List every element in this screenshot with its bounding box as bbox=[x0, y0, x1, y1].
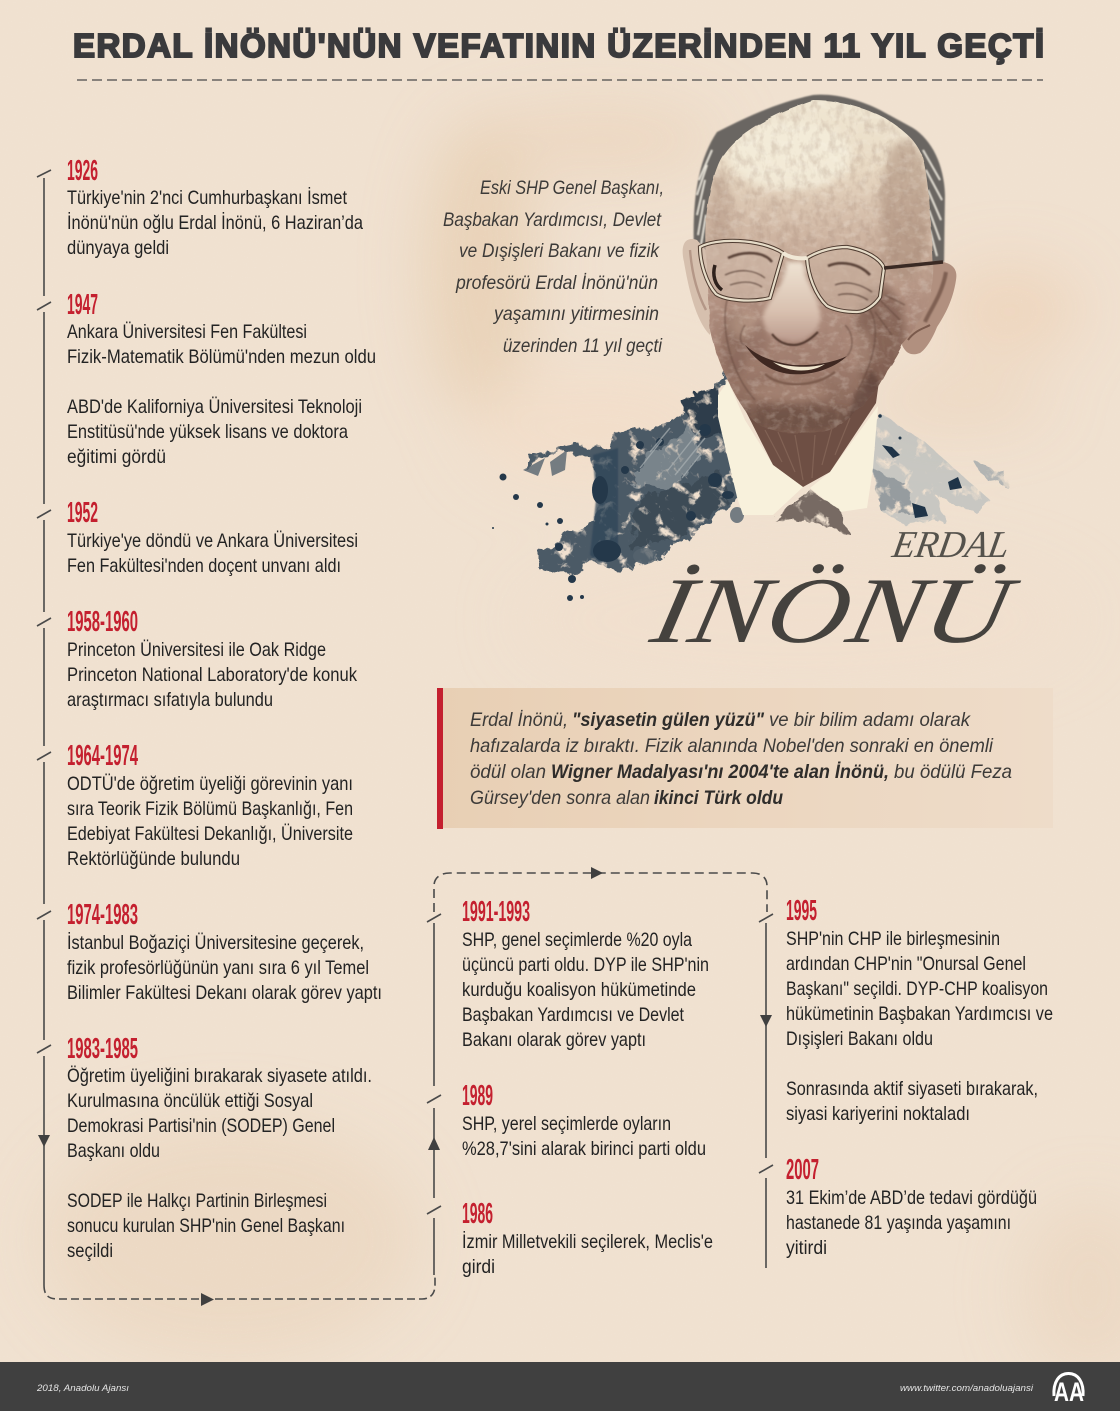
entry: 1983-1985: SODEP ile Halkçı Partinin Birleşmesi bbox=[67, 1190, 327, 1212]
entry: 1952: Fen Fakültesi'nden doçent unvanı aldı bbox=[67, 555, 341, 577]
entry: 1983-1985: Demokrasi Partisi'nin (SODEP) Genel bbox=[67, 1115, 335, 1137]
arrow: top right bbox=[591, 867, 603, 879]
entry: 1983-1985: sonucu kurulan SHP'nin Genel Başkanı bbox=[67, 1215, 345, 1237]
entry: 1958-1960: Princeton National Laboratory'de konuk bbox=[67, 664, 357, 686]
entry: 1947: 1947 bbox=[67, 289, 98, 321]
entry: 1947: ABD'de Kaliforniya Üniversitesi Teknoloji bbox=[67, 396, 362, 418]
entry: 1964-1974: ODTÜ'de öğretim üyeliği görevinin yanı bbox=[67, 773, 353, 795]
entry: 1964-1974: Rektörlüğünde bulundu bbox=[67, 848, 240, 870]
arrow: bottom right bbox=[201, 1293, 214, 1306]
entry: 1995: 1995 bbox=[786, 895, 817, 927]
mouth bbox=[725, 295, 905, 400]
entry: 1995: Dışişleri Bakanı oldu bbox=[786, 1028, 933, 1050]
entry: 1983-1985: Kurulmasına öncülük ettiği Sosyal bbox=[67, 1090, 313, 1112]
intro text: Eski SHP Genel Başkanı, bbox=[480, 177, 664, 199]
entry: 1926: dünyaya geldi bbox=[67, 237, 169, 259]
arrow: left column down bbox=[38, 1135, 50, 1147]
entry: 1995: Başkanı" seçildi. DYP-CHP koalisyon bbox=[786, 978, 1048, 1000]
neck bbox=[725, 345, 884, 487]
entry: 1974-1983: 1974-1983 bbox=[67, 899, 138, 931]
entry: 1995: ardından CHP'nin "Onursal Genel bbox=[786, 953, 1026, 975]
entry: 1926: Türkiye'nin 2'nci Cumhurbaşkanı İsmet bbox=[67, 186, 347, 209]
intro text: üzerinden 11 yıl geçti bbox=[503, 335, 663, 357]
name: İNÖNÜ: İNÖNÜ bbox=[642, 558, 1026, 663]
entry: 1958-1960: Princeton Üniversitesi ile Oak Ridge bbox=[67, 639, 326, 661]
entry: 1991-1993: Bakanı olarak görev yaptı bbox=[462, 1029, 646, 1051]
entry: 1947: eğitimi gördü bbox=[67, 446, 166, 468]
callout bbox=[437, 688, 1053, 829]
entry: 1983-1985: 1983-1985 bbox=[67, 1033, 138, 1065]
callout text bbox=[470, 709, 1012, 809]
callout text: ve bir bilim adamı olarak bbox=[769, 709, 971, 731]
entry: 1947: Ankara Üniversitesi Fen Fakültesi bbox=[67, 321, 307, 343]
intro text: ve Dışişleri Bakanı ve fizik bbox=[459, 240, 660, 262]
callout text: bu ödülü Feza bbox=[894, 761, 1012, 783]
callout text: "siyasetin gülen yüzü" bbox=[572, 709, 765, 731]
entry: 1991-1993: Başbakan Yardımcısı ve Devlet bbox=[462, 1004, 684, 1026]
footer link: www.twitter.com/anadoluajansi bbox=[900, 1383, 1034, 1394]
entry: 1986: İzmir Milletvekili seçilerek, Meclis'e bbox=[462, 1230, 713, 1253]
entry: 1983-1985: Başkanı oldu bbox=[67, 1140, 160, 1162]
entry: 1995: SHP'nin CHP ile birleşmesinin bbox=[786, 928, 1000, 950]
entry: 1991-1993: kurduğu koalisyon hükümetinde bbox=[462, 979, 696, 1001]
entry: 1991-1993: üçüncü parti oldu. DYP ile SHP'nin bbox=[462, 954, 709, 976]
entry: 2007: 2007 bbox=[786, 1154, 819, 1186]
entry: 2007: 31 Ekim’de ABD’de tedavi gördüğü bbox=[786, 1187, 1037, 1209]
entry: 1989: 1989 bbox=[462, 1080, 493, 1112]
entry: 1964-1974 bbox=[67, 740, 353, 870]
entry: 1995: Sonrasında aktif siyaseti bırakarak, bbox=[786, 1078, 1038, 1100]
entry: 1991-1993: 1991-1993 bbox=[462, 896, 530, 928]
entry: 1974-1983: Bilimler Fakültesi Dekanı olarak görev yaptı bbox=[67, 982, 382, 1004]
entry: 1989: %28,7'sini alarak birinci parti oldu bbox=[462, 1138, 706, 1160]
intro text: Başbakan Yardımcısı, Devlet bbox=[443, 209, 662, 231]
hair bbox=[694, 95, 945, 262]
entry: 1991-1993: SHP, genel seçimlerde %20 oyla bbox=[462, 929, 692, 951]
callout text: Erdal İnönü, bbox=[470, 709, 568, 731]
entry: 1947: Fizik-Matematik Bölümü'nden mezun oldu bbox=[67, 346, 376, 368]
timeline connector lines bbox=[37, 170, 773, 1306]
title: ERDAL İNÖNÜ'NÜN VEFATININ ÜZERİNDEN 11 YIL GEÇTİ bbox=[73, 27, 1044, 64]
entry: 1989 bbox=[462, 1080, 706, 1160]
entry: 1964-1974: Edebiyat Fakültesi Dekanlığı, Üniversite bbox=[67, 823, 353, 845]
entry: 1952: 1952 bbox=[67, 497, 98, 529]
entry: 1926: İnönü'nün oğlu Erdal İnönü, 6 Haziran’da bbox=[67, 211, 363, 234]
ears bbox=[683, 239, 956, 354]
entry: 1958-1960 bbox=[67, 606, 357, 711]
entry: 1986 bbox=[462, 1198, 713, 1278]
icon: AA logo: AA bbox=[1054, 1377, 1084, 1407]
entry: 2007: yitirdi bbox=[786, 1237, 827, 1259]
entry: 1995: hükümetinin Başbakan Yardımcısı ve bbox=[786, 1003, 1053, 1025]
entry: 1974-1983 bbox=[67, 899, 382, 1004]
arrow: middle column up bbox=[428, 1137, 440, 1150]
intro text: yaşamını yitirmesinin bbox=[492, 303, 659, 325]
entry: 1952 bbox=[67, 497, 358, 577]
entry: 1986: 1986 bbox=[462, 1198, 493, 1230]
entry: 1926: 1926 bbox=[67, 155, 98, 187]
entry: 1964-1974: 1964-1974 bbox=[67, 740, 138, 772]
entry: 1995: siyasi kariyerini noktaladı bbox=[786, 1103, 970, 1125]
entry: 1989: SHP, yerel seçimlerde oyların bbox=[462, 1113, 671, 1135]
entry: 1958-1960: araştırmacı sıfatıyla bulundu bbox=[67, 689, 273, 711]
entry: 1947: Enstitüsü'nde yüksek lisans ve doktora bbox=[67, 421, 348, 443]
entry: 1958-1960: 1958-1960 bbox=[67, 606, 138, 638]
face bbox=[705, 100, 934, 434]
entry: 1983-1985 bbox=[67, 1033, 372, 1262]
entry: 1974-1983: fizik profesörlüğünün yanı sıra 6 yıl Temel bbox=[67, 957, 369, 979]
entry: 1926 bbox=[67, 155, 363, 259]
intro text: profesörü Erdal İnönü'nün bbox=[455, 272, 658, 294]
intro text bbox=[443, 177, 664, 357]
nose bbox=[763, 262, 821, 345]
entry: 1983-1985: seçildi bbox=[67, 1240, 113, 1262]
arrow: right column down bbox=[760, 1015, 772, 1027]
entry: 1974-1983: İstanbul Boğaziçi Üniversitesine geçerek, bbox=[67, 931, 364, 954]
callout text: hafızalarda iz bıraktı. Fizik alanında Nobel'den sonraki en önemli bbox=[470, 735, 994, 757]
footer credit: 2018, Anadolu Ajansı bbox=[36, 1383, 129, 1394]
footer bbox=[0, 1362, 1120, 1411]
jacket right bbox=[872, 412, 1008, 525]
callout text: Gürsey'den sonra alan bbox=[470, 787, 650, 809]
callout text: ikinci Türk oldu bbox=[654, 787, 783, 809]
entry: 2007: hastanede 81 yaşında yaşamını bbox=[786, 1212, 1011, 1234]
entry: 1952: Türkiye'ye döndü ve Ankara Üniversitesi bbox=[67, 530, 358, 552]
portrait illustration bbox=[492, 95, 1008, 601]
entry: 1947 bbox=[67, 289, 376, 468]
callout text: Wigner Madalyası'nı 2004'te alan İnönü, bbox=[551, 760, 889, 783]
entry: 1983-1985: Öğretim üyeliğini bırakarak siyasete atıldı. bbox=[67, 1065, 372, 1087]
callout text: ödül olan bbox=[470, 761, 546, 783]
entry: 2007 bbox=[786, 1154, 1037, 1259]
entry: 1995 bbox=[786, 895, 1053, 1125]
entry: 1986: girdi bbox=[462, 1256, 495, 1278]
shirt collar bbox=[718, 381, 878, 515]
entry: 1964-1974: sıra Teorik Fizik Bölümü Başkanlığı, Fen bbox=[67, 798, 353, 820]
tie bbox=[772, 489, 850, 534]
name: ERDAL: ERDAL bbox=[888, 524, 1013, 566]
entry: 1991-1993 bbox=[462, 896, 709, 1051]
glasses bbox=[700, 241, 943, 312]
jacket left bbox=[492, 373, 744, 601]
